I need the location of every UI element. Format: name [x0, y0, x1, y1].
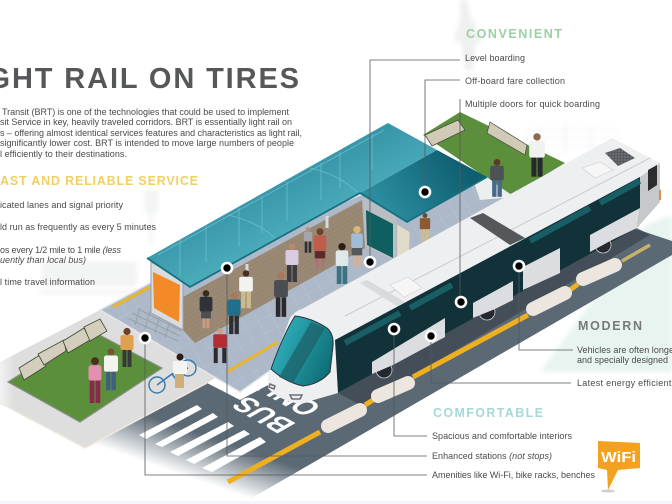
station platform: [100, 177, 515, 392]
roof hatch rear: [582, 162, 613, 178]
person: salmon top woman: [314, 228, 326, 269]
orange ad panel: [151, 262, 183, 330]
left lawn: [8, 330, 162, 422]
right lawn with benches: [423, 112, 565, 195]
cyclist with bicycle: [149, 354, 196, 393]
list: convenient: Multiple doors for quick boarding: [465, 99, 600, 109]
waiting passengers: [89, 133, 545, 403]
intro paragraph: Transit (BRT) is one of the technologies that could be used to implement: [2, 107, 289, 117]
rear tail light: [659, 190, 661, 200]
windshield: [271, 316, 333, 386]
list: comfortable: [432, 431, 596, 480]
person: pink top woman: [89, 357, 101, 403]
person: orange top woman: [120, 328, 134, 367]
leader: spacious interiors: [394, 329, 427, 436]
list: fast and reliable service: [0, 200, 156, 287]
list: fast and reliable service: ld run as frequently as every 5 minutes: [0, 222, 156, 232]
articulated bus: [268, 138, 661, 404]
callout dots: [140, 187, 524, 343]
person: dark suit: [274, 272, 288, 317]
watermark: modern skyline tint: [540, 215, 672, 372]
list: fast and reliable service: uently than local bus): [0, 255, 86, 265]
articulation joint: [470, 213, 525, 245]
person: brown jacket: [420, 213, 430, 242]
person: lavender shirt: [286, 243, 298, 282]
roof eave: [147, 177, 487, 287]
sidewalk with left lawn: [0, 310, 215, 448]
bus body: [268, 138, 660, 404]
rear grille: [648, 165, 657, 191]
platform yellow strips: [113, 287, 278, 372]
station end wall: [473, 177, 513, 200]
road lettering: BUS ONLY: ONLY: [240, 369, 329, 420]
sidewalk slab: [0, 310, 215, 448]
list: fast and reliable service: icated lanes and signal priority: [0, 200, 124, 210]
sidewalk rim: [0, 383, 207, 448]
bus shadow on road: [338, 228, 650, 406]
leader: enhanced stations: [227, 268, 427, 456]
person: blonde woman: [351, 226, 363, 267]
bus shelter: [147, 123, 487, 343]
leader: amenities: [145, 338, 427, 475]
leader: vehicles longer: [519, 266, 573, 350]
person: black jacket woman: [200, 290, 212, 328]
heading: convenient: CONVENIENT: [466, 27, 562, 41]
road lettering: BUS ONLY: [225, 369, 329, 437]
roof hatch front: [390, 277, 422, 297]
shelter posts: [247, 216, 327, 272]
road lettering: BUS ONLY: BUS: [225, 392, 303, 437]
headlights: [269, 384, 302, 399]
right benches: [425, 120, 527, 155]
list: modern: [577, 345, 672, 388]
list: convenient: [465, 53, 600, 109]
bike rack: [127, 307, 182, 341]
door frame: [363, 198, 396, 262]
windshield shading: [279, 322, 325, 383]
lower body panels: [372, 208, 640, 374]
roof shoulder line: [345, 158, 650, 316]
road: [70, 190, 672, 502]
list: fast and reliable service: l time travel information: [0, 277, 95, 287]
person: red sweater: [213, 328, 227, 363]
icon: WiFi speech bubble: [598, 441, 640, 492]
heading: comfortable: COMFORTABLE: [433, 406, 543, 420]
right lawn: [423, 112, 565, 195]
watermark: clock tower: [455, 0, 482, 70]
brick wall: [183, 200, 365, 343]
roof grille: [605, 148, 635, 166]
intro paragraph: l efficiently to their destinations.: [0, 149, 127, 159]
watermark: building grid: [525, 122, 620, 155]
rear dark roof: [360, 150, 487, 222]
glass door: [366, 210, 393, 258]
list: convenient: Level boarding: [465, 53, 525, 63]
person: white shirt khaki: [239, 270, 253, 308]
leader: energy efficient: [431, 336, 571, 383]
watermark: bus stop sign and bench: [40, 190, 158, 294]
person: blue sweater: [228, 292, 240, 334]
person: white blouse teal trousers: [336, 243, 348, 284]
intro paragraph: significantly lower cost. BRT is intended to move large numbers of people: [0, 138, 294, 148]
road markings: [139, 228, 650, 482]
list: comfortable: Spacious and comfortable interiors: [432, 431, 572, 441]
front roof glass: [147, 123, 437, 287]
leader: level boarding: [370, 60, 460, 262]
yellow centre line: [228, 284, 578, 482]
person: dark sweater: [490, 159, 504, 197]
leader: off-board fare: [425, 80, 460, 192]
wheels: [376, 237, 611, 378]
roof ribs: [158, 130, 384, 276]
list: comfortable: Enhanced stations (not stops): [432, 451, 552, 461]
list: fast and reliable service: os every 1/2 mile to 1 mile (less: [0, 245, 122, 255]
person: grey suit: [304, 227, 312, 253]
boarding islands: [328, 265, 615, 426]
person: white shirt on lawn: [529, 133, 545, 177]
person: white shirt jeans: [104, 348, 118, 390]
bus rear side: [637, 163, 660, 228]
list: comfortable: Amenities like Wi-Fi, bike racks, benches: [432, 470, 596, 480]
list: modern: and specially designed: [577, 355, 668, 365]
list: convenient: Off-board fare collection: [465, 76, 565, 86]
bottom strip: [0, 501, 672, 504]
roof seam band: [360, 280, 405, 306]
heading: modern: MODERN: [578, 319, 642, 333]
window reflections: [345, 181, 640, 343]
leader lines: [145, 60, 573, 475]
intro paragraph: sit Service in key, heavily traveled corridors. BRT is essentially light rail on: [0, 117, 292, 127]
faded yellow line end: [622, 245, 650, 261]
left benches: [19, 319, 107, 380]
faint background watermark scenery: [40, 0, 672, 372]
intro paragraph: [0, 107, 302, 159]
heading: fast and reliable service: AST AND RELIABLE SERVICE: [0, 174, 198, 188]
intro paragraph: s – offering almost identical services features and characteristics as light rail,: [0, 128, 302, 138]
window band: [335, 177, 640, 393]
crosswalk stripes: [139, 405, 266, 472]
leader: multiple doors: [459, 99, 461, 302]
ticket kiosk: [397, 224, 410, 261]
icon: WiFi speech bubble: WiFi: [601, 449, 636, 466]
